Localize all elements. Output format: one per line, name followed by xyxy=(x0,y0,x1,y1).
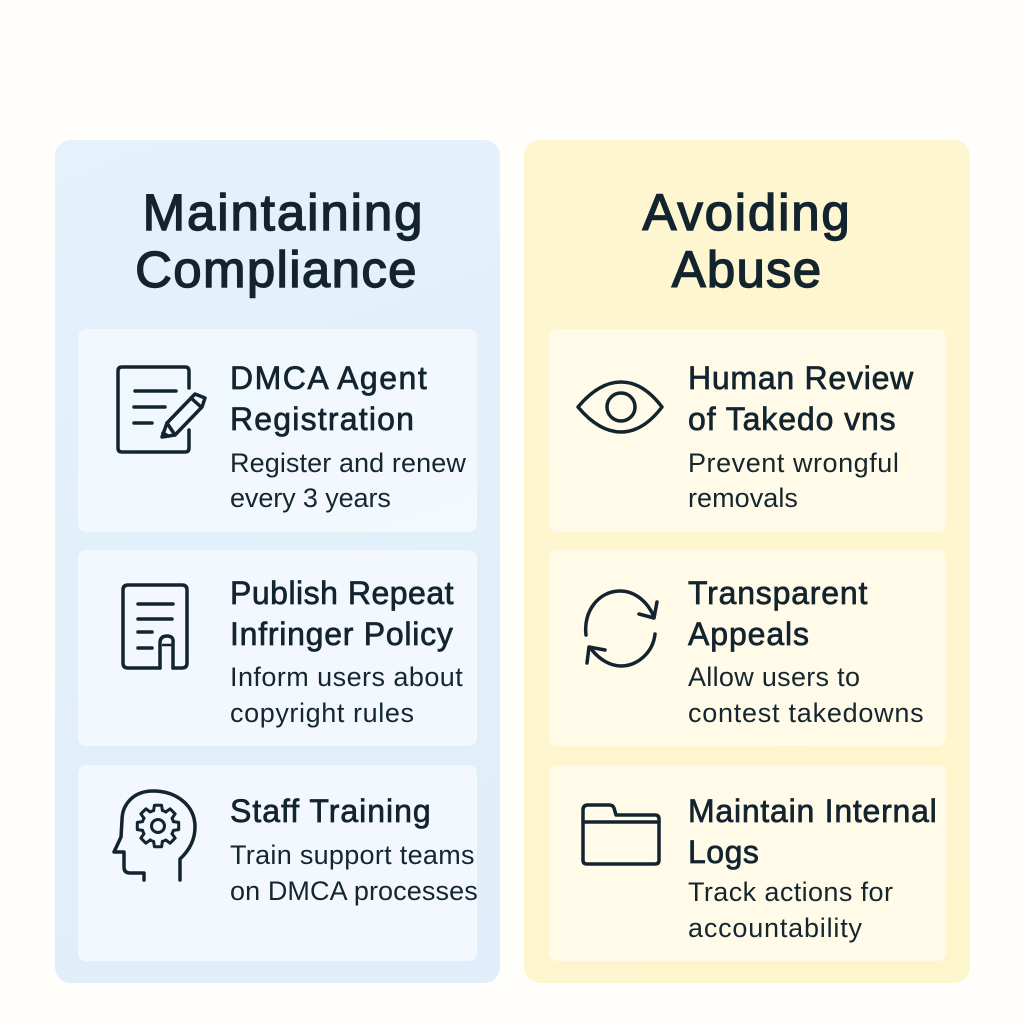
text: human review of takedowns: of Takedo vns xyxy=(688,401,897,437)
heading: maintaining compliance xyxy=(135,184,424,298)
panel: maintaining compliance xyxy=(55,140,500,983)
text: staff training: Staff Training xyxy=(230,793,432,829)
icon: document with pencil xyxy=(116,365,207,454)
text: human review of takedowns: Prevent wrongful xyxy=(688,448,899,478)
heading: avoiding abuse: Abuse xyxy=(672,241,822,298)
text: maintain internal logs: Logs xyxy=(688,834,759,870)
icon: head with gear xyxy=(112,789,197,882)
text: staff training: Train support teams xyxy=(230,840,475,870)
text: maintain internal logs: Track actions for xyxy=(688,877,893,907)
heading: avoiding abuse: Avoiding xyxy=(642,184,852,241)
text: human review of takedowns: Human Review xyxy=(688,360,914,396)
heading: avoiding abuse xyxy=(642,184,852,298)
text: transparent appeals: Allow users to xyxy=(688,662,860,692)
card: maintain internal logs xyxy=(549,765,946,961)
text: publish repeat infringer policy: Publish Repeat xyxy=(230,575,454,611)
text: DMCA agent registration xyxy=(230,360,466,513)
text: publish repeat infringer policy: copyright rules xyxy=(230,698,415,728)
text: transparent appeals: Appeals xyxy=(688,616,810,652)
text: human review of takedowns: removals xyxy=(688,483,798,513)
text: transparent appeals: Transparent xyxy=(688,575,868,611)
text: staff training xyxy=(230,793,478,906)
text: publish repeat infringer policy xyxy=(230,575,463,728)
text: transparent appeals xyxy=(688,575,924,728)
icon: policy document xyxy=(121,583,189,670)
card: transparent appeals xyxy=(549,550,946,746)
text: DMCA agent registration: Register and renew xyxy=(230,448,466,478)
text: transparent appeals: contest takedowns xyxy=(688,698,924,728)
text: maintain internal logs: accountability xyxy=(688,913,863,943)
text: publish repeat infringer policy: Inform users about xyxy=(230,662,463,692)
text: maintain internal logs xyxy=(688,793,938,943)
card: staff training xyxy=(78,765,477,961)
card: publish repeat infringer policy xyxy=(78,550,477,746)
icon: eye xyxy=(576,380,664,434)
heading: maintaining compliance: Maintaining xyxy=(143,184,424,241)
card: DMCA agent registration xyxy=(78,329,477,532)
panel: avoiding abuse xyxy=(524,140,970,983)
icon: folder xyxy=(581,803,661,866)
text: human review of takedowns xyxy=(688,360,914,513)
text: maintain internal logs: Maintain Internal xyxy=(688,793,938,829)
card: human review of takedowns xyxy=(549,329,946,532)
text: DMCA agent registration: Registration xyxy=(230,401,415,437)
text: DMCA agent registration: every 3 years xyxy=(230,483,391,513)
text: DMCA agent registration: DMCA Agent xyxy=(230,360,428,396)
text: publish repeat infringer policy: Infringer Policy xyxy=(230,616,454,652)
icon: circular arrows xyxy=(584,589,659,668)
text: staff training: on DMCA processes xyxy=(230,876,478,906)
heading: maintaining compliance: Compliance xyxy=(135,241,418,298)
